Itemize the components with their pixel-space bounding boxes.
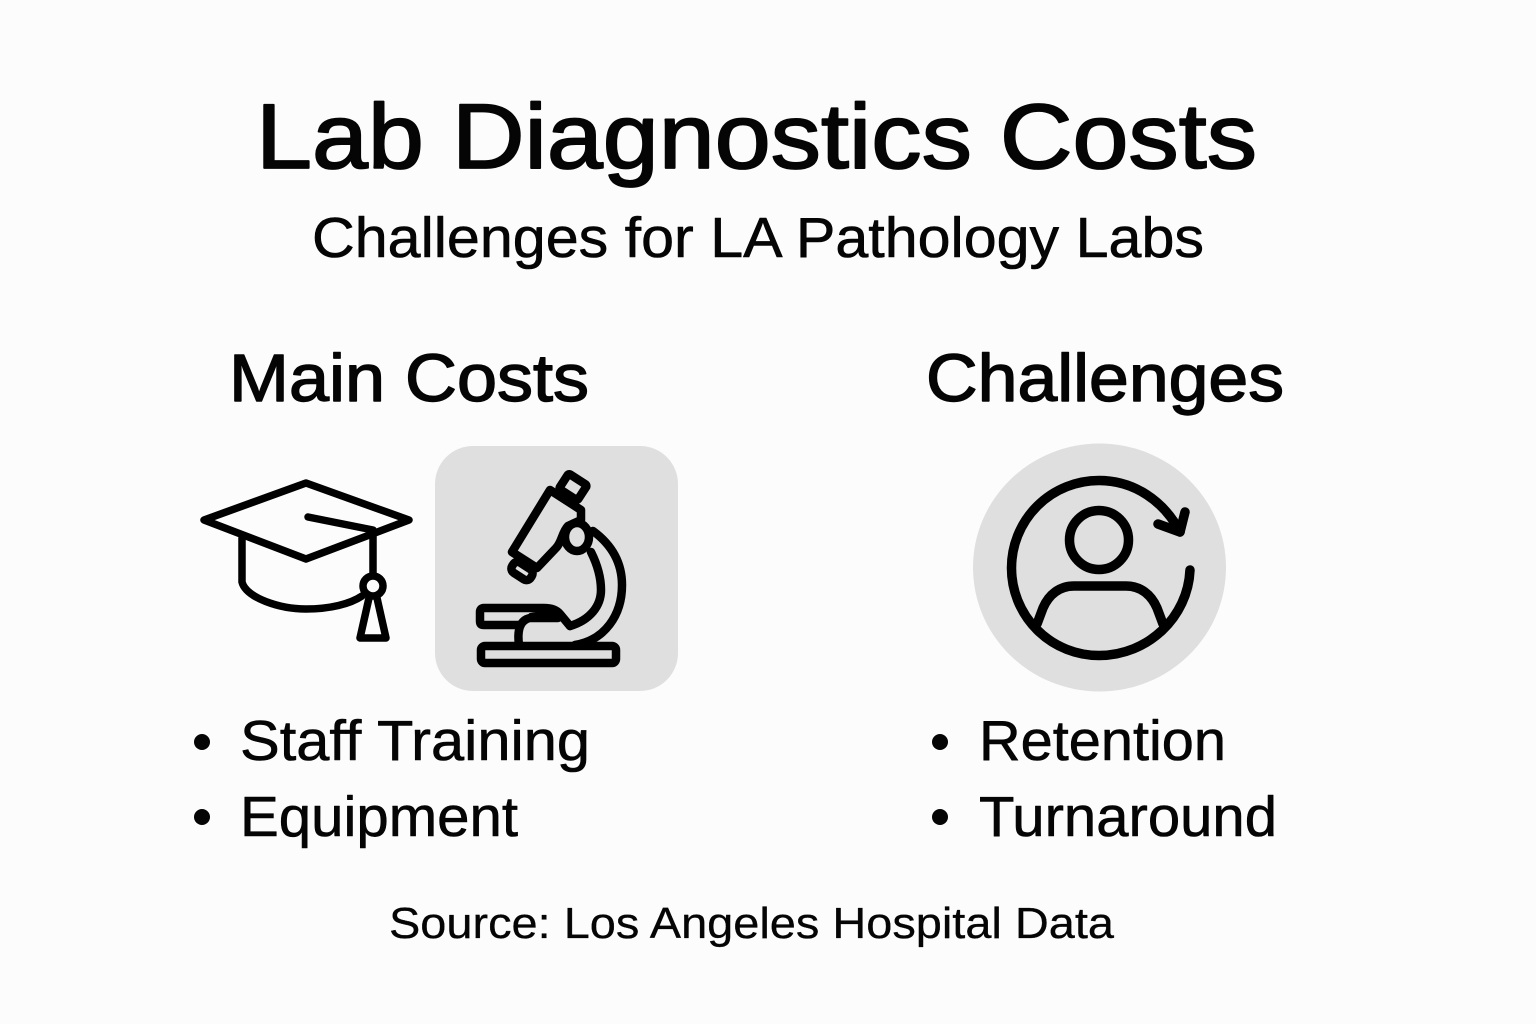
list: main costs — [194, 709, 590, 849]
icon: microscope — [435, 446, 678, 691]
panel: main costs — [194, 341, 678, 849]
title: Lab Diagnostics Costs — [256, 86, 1257, 188]
panel: challenges — [926, 341, 1284, 849]
list: main costs: Staff Training — [240, 709, 590, 773]
list: challenges: Turnaround — [979, 785, 1277, 849]
list: challenges — [932, 709, 1277, 849]
list: challenges: Retention — [979, 709, 1226, 773]
list: main costs: Equipment — [240, 785, 518, 849]
icon: graduation cap — [204, 483, 409, 638]
icon: person with rotation arrow — [973, 444, 1226, 692]
subtitle: Challenges for LA Pathology Labs — [312, 206, 1204, 270]
source note: Source: Los Angeles Hospital Data — [389, 899, 1115, 948]
heading: main costs: Main Costs — [229, 341, 589, 416]
heading: challenges: Challenges — [926, 341, 1284, 416]
